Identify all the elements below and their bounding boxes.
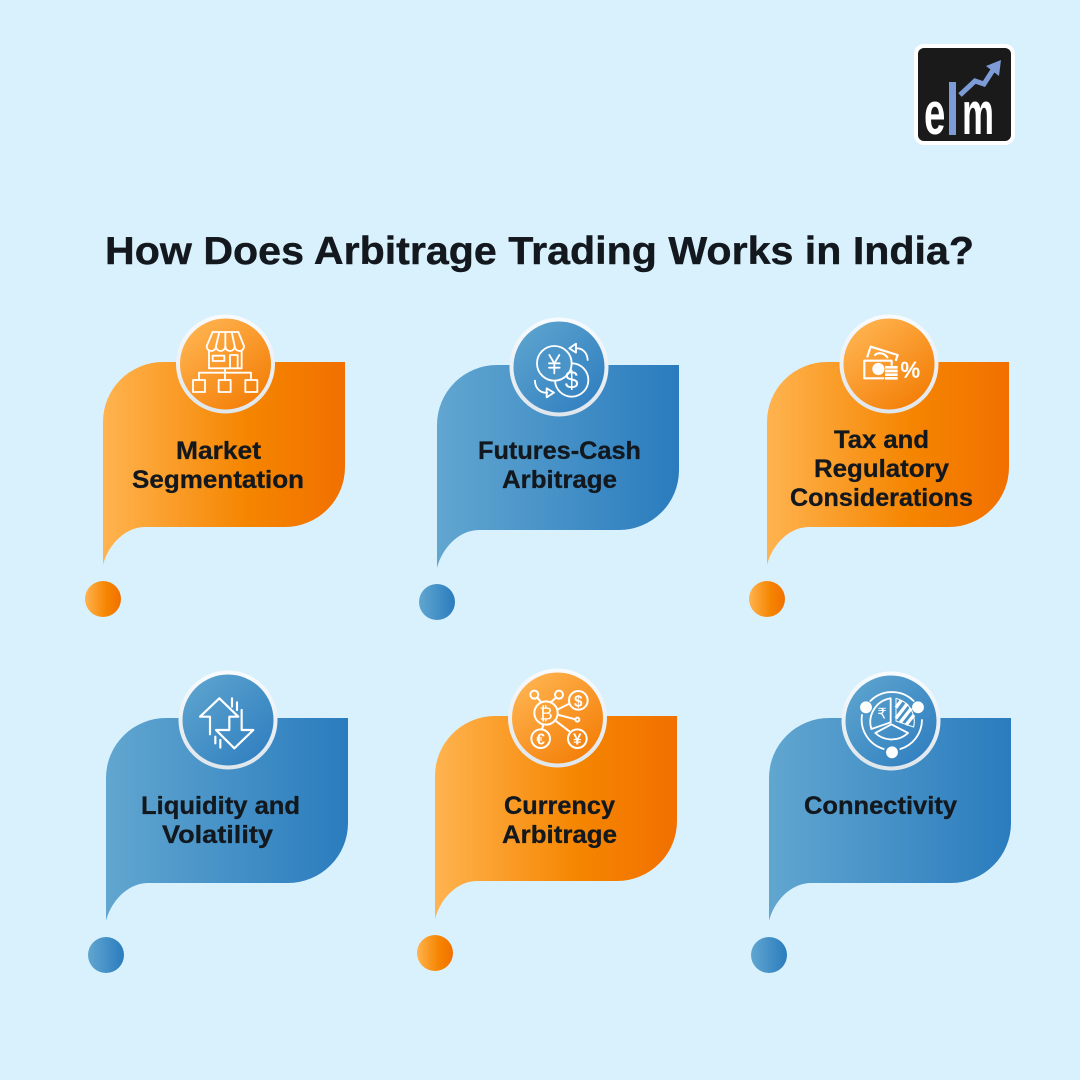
icon badge	[512, 320, 606, 414]
icon: store hierarchy	[193, 332, 257, 392]
logo: elm	[914, 44, 1015, 147]
icon: crypto network: €	[536, 732, 545, 749]
icon badge	[844, 674, 938, 768]
dot	[88, 937, 124, 973]
icon: crypto network: $	[574, 693, 583, 710]
icon: crypto network	[530, 691, 588, 749]
label: Segmentation	[132, 466, 304, 494]
label: Currency	[504, 792, 615, 820]
label: Tax and	[834, 426, 929, 454]
icon badge	[178, 316, 273, 412]
icon: currency exchange	[535, 344, 588, 397]
label: Volatility	[162, 821, 273, 849]
icon: crypto network: ₿	[539, 704, 553, 724]
dot	[751, 937, 787, 973]
label: Market	[176, 437, 262, 465]
speech bubble	[435, 716, 677, 919]
label: Considerations	[790, 484, 973, 512]
dot	[419, 584, 455, 620]
icon badge	[510, 670, 605, 766]
panel: Connectivity	[751, 674, 1011, 973]
panel: Tax and Regulatory Considerations	[749, 316, 1009, 617]
icon: money and percent	[864, 347, 920, 383]
logo: elm: m	[962, 81, 994, 147]
label	[790, 426, 973, 512]
dot	[85, 581, 121, 617]
label: Regulatory	[814, 455, 949, 483]
dot	[749, 581, 785, 617]
icon: crypto network: ¥	[573, 732, 582, 749]
icon: currency exchange: $	[565, 368, 579, 395]
speech bubble	[106, 718, 348, 921]
icon: money and percent: %	[901, 358, 920, 383]
label: Liquidity and	[141, 792, 300, 820]
speech bubble	[769, 718, 1011, 921]
panel: Futures-Cash Arbitrage	[419, 320, 679, 620]
label: Futures-Cash	[478, 437, 641, 465]
label	[132, 437, 304, 494]
label	[141, 792, 300, 849]
icon: pie chart connectivity	[861, 692, 923, 757]
title: How Does Arbitrage Trading Works in India?	[105, 230, 974, 273]
label: Connectivity	[804, 792, 957, 820]
speech bubble	[103, 362, 345, 565]
icon badge	[180, 672, 276, 768]
logo: elm: e	[924, 79, 945, 147]
panel: Currency Arbitrage	[417, 670, 677, 971]
label: Arbitrage	[502, 821, 617, 849]
label: Arbitrage	[502, 466, 617, 494]
speech bubble	[437, 365, 679, 568]
dot	[417, 935, 453, 971]
panel: Market Segmentation	[85, 316, 345, 617]
label	[502, 792, 617, 849]
icon badge	[842, 316, 936, 412]
panel: Liquidity and Volatility	[88, 672, 348, 973]
speech bubble	[767, 362, 1009, 565]
icon: pie chart connectivity: ₹	[877, 705, 887, 722]
label	[478, 437, 641, 494]
icon: up and down arrows	[200, 698, 253, 748]
